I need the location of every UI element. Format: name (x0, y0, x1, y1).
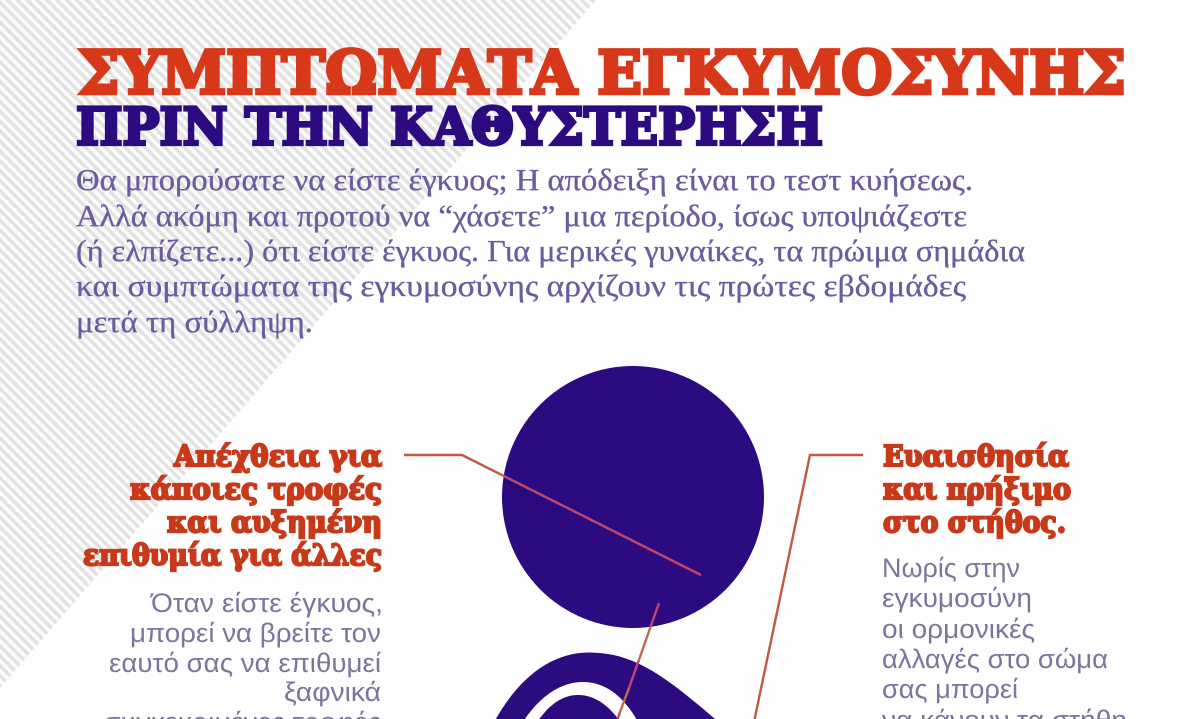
right heading: στο στήθος. (883, 505, 1066, 539)
left body text: μπορεί να βρείτε τον (130, 618, 381, 648)
torso outer shape (490, 652, 730, 719)
left heading: και αυξημένη (167, 505, 382, 539)
left body text (103, 588, 383, 719)
torso white ring (518, 682, 642, 719)
title line 1: ΣΥΜΠΤΩΜΑΤΑ ΕΓΚΥΜΟΣΥΝΗΣ (78, 38, 1126, 108)
head circle (502, 366, 764, 628)
figure: pregnant body silhouette (490, 366, 764, 719)
right heading: και πρήξιμο (883, 472, 1071, 506)
right body text: Νωρίς στην (882, 553, 1020, 583)
left body text: ξαφνικά (284, 677, 381, 707)
right body text: οι ορμονικές (882, 614, 1035, 644)
left body text: Όταν είστε έγκυος, (150, 588, 383, 618)
left body text: εαυτό σας να επιθυμεί (109, 648, 381, 678)
leader line: food aversion (404, 455, 701, 575)
intro paragraph: Θα μπορούσατε να είστε έγκυος; Η απόδειξη είναι το τεστ κυήσεως. (76, 162, 973, 197)
right heading: Ευαισθησία (883, 439, 1069, 473)
title (76, 38, 1126, 158)
intro paragraph: και συμπτώματα της εγκυμοσύνης αρχίζουν τις πρώτες εβδομάδες (76, 268, 966, 303)
intro paragraph: (ή ελπίζετε...) ότι είστε έγκυος. Για μερικές γυναίκες, τα πρώιμα σημάδια (76, 233, 1025, 268)
left heading: κάποιες τροφές (130, 472, 382, 506)
intro paragraph (76, 162, 1025, 339)
right heading (883, 439, 1071, 539)
intro paragraph: Αλλά ακόμη και προτού να “χάσετε” μια περίοδο, ίσως υποψιάζεστε (76, 198, 967, 233)
right body text: σας μπορεί (882, 674, 1018, 704)
right body text (882, 553, 1127, 719)
left heading: Απέχθεια για (173, 439, 382, 473)
right body text: αλλαγές στο σώμα (882, 644, 1108, 674)
leader line: breast tenderness (754, 455, 863, 719)
left heading (83, 439, 382, 572)
torso inner shape (532, 695, 626, 719)
left heading: επιθυμία για άλλες (83, 538, 382, 572)
title line 2: ΠΡΙΝ ΤΗΝ ΚΑΘΥΣΤΕΡΗΣΗ (76, 98, 823, 158)
intro paragraph: μετά τη σύλληψη. (76, 304, 313, 339)
right body text: εγκυμοσύνη (882, 583, 1032, 613)
leader line: centre (617, 603, 659, 719)
